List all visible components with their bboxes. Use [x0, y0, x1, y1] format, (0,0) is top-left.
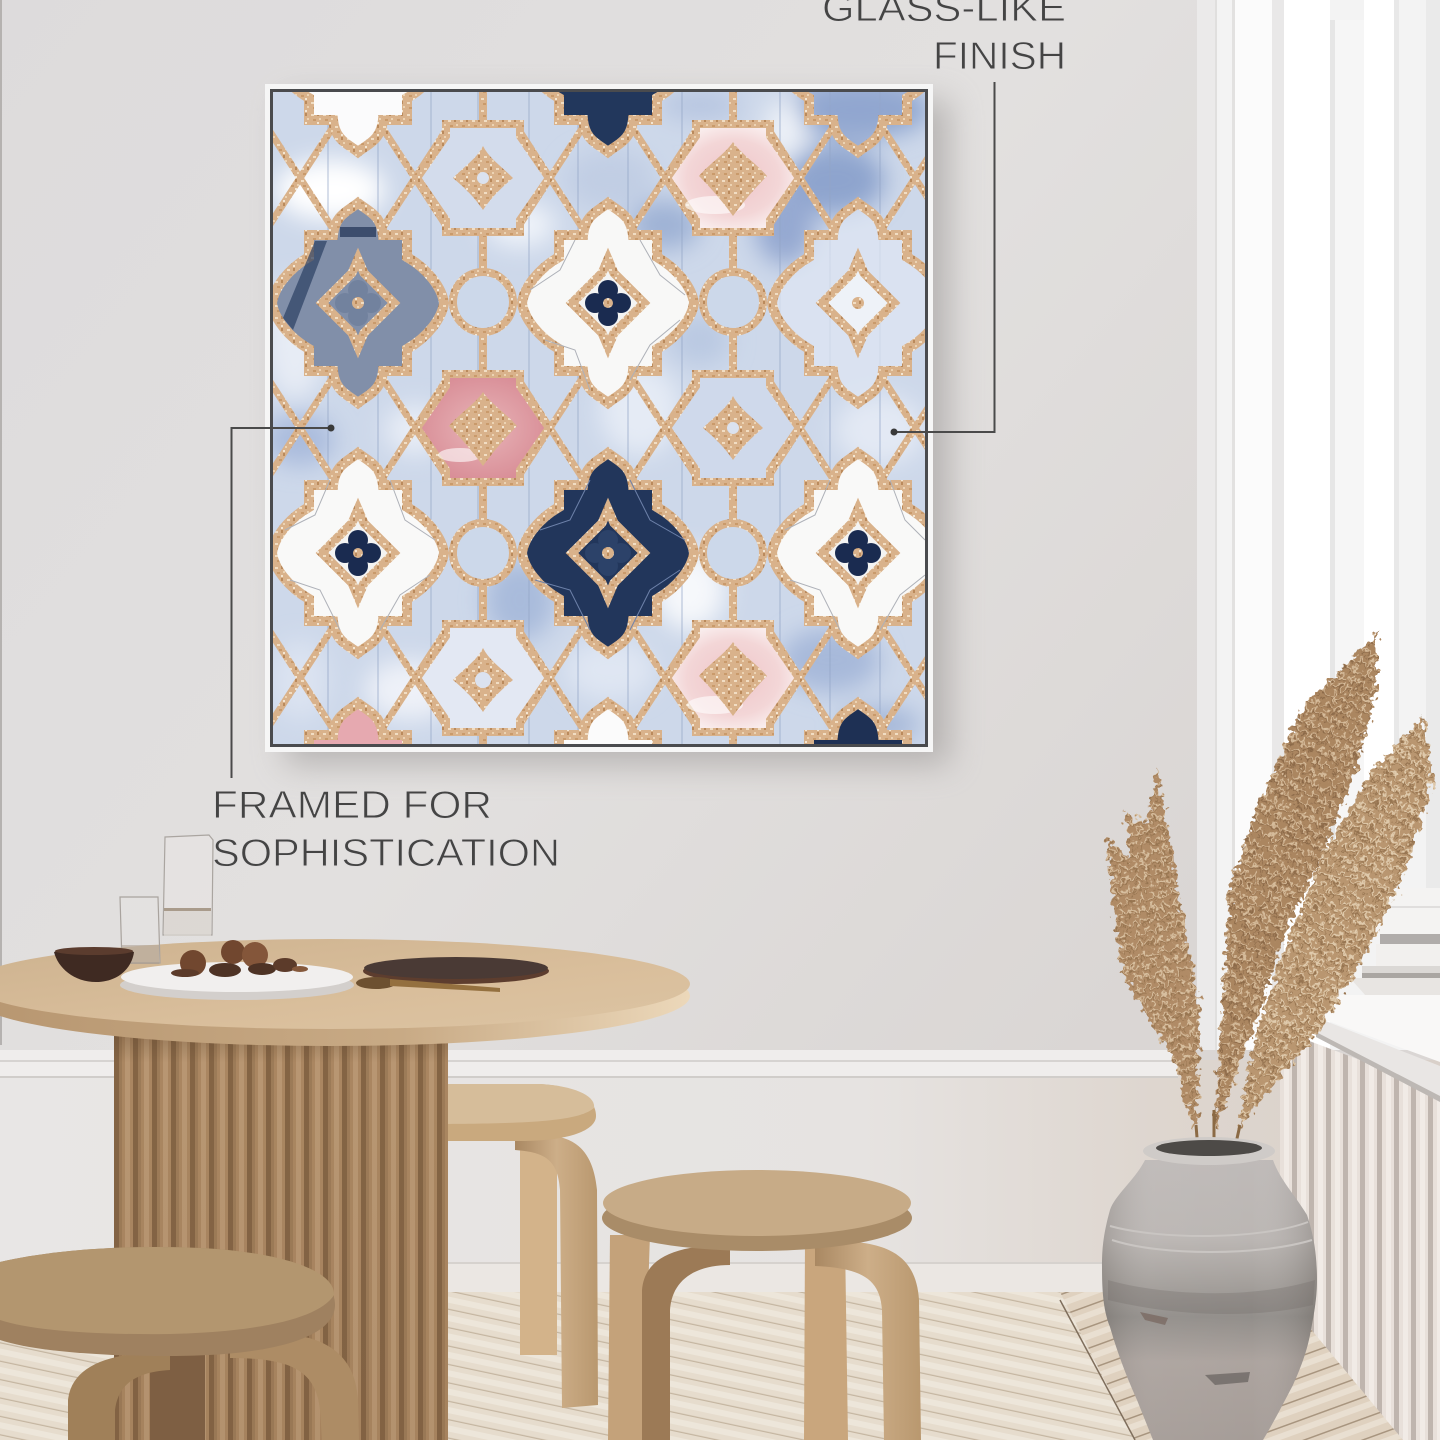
vertical connectors — [479, 92, 737, 746]
ring medallions — [453, 272, 763, 583]
wainscot rail and baseboard — [0, 1050, 1280, 1292]
table top — [0, 939, 690, 1046]
gold centre ornaments — [449, 142, 767, 716]
pampas: left plume — [1107, 767, 1200, 1130]
hexagon medallions — [417, 124, 799, 732]
radiator — [1280, 1030, 1440, 1440]
centre stool — [602, 1170, 921, 1440]
marble plate — [120, 962, 354, 1000]
table pedestal — [114, 1030, 448, 1440]
wooden floor — [0, 1292, 1403, 1440]
window frame and trim — [1197, 0, 1440, 1050]
leader line: glass-like finish — [890, 82, 994, 436]
pampas: middle plume — [1213, 633, 1377, 1130]
pampas: stems — [1196, 1110, 1240, 1152]
window sill — [1316, 995, 1440, 1102]
label: framed for sophistication — [212, 784, 560, 875]
pampas: right plume — [1238, 717, 1433, 1130]
front left stool — [0, 1247, 359, 1440]
quatrefoils — [273, 92, 925, 744]
label: framed for sophistication: SOPHISTICATION — [212, 832, 560, 875]
highlights on gray quatrefoil — [283, 241, 327, 330]
shadow of framed art — [285, 100, 950, 765]
glass carafe — [163, 835, 213, 936]
rose petals — [438, 196, 745, 714]
dark wooden bowl — [54, 947, 134, 982]
inner diamonds — [322, 259, 894, 597]
label: glass-like finish: FINISH — [933, 35, 1066, 78]
ceramic vase — [1102, 1137, 1317, 1440]
label: glass-like finish — [822, 0, 1066, 78]
lattice crossings — [265, 124, 950, 732]
dark wooden plate — [363, 957, 549, 984]
leader line: framed for sophistication — [232, 424, 334, 778]
crackle lines — [285, 240, 925, 630]
inner flowers — [335, 280, 381, 326]
white frame — [265, 84, 933, 752]
label: framed for sophistication: FRAMED FOR — [212, 784, 492, 827]
back stool — [430, 1084, 598, 1408]
books on window sill — [1350, 934, 1440, 996]
watercolour background — [265, 82, 930, 743]
pampas grass — [1107, 633, 1433, 1152]
nuts on plate — [171, 940, 308, 977]
framed art — [265, 84, 933, 752]
art pattern — [273, 92, 925, 744]
glass tumbler — [120, 897, 160, 964]
spoons — [356, 977, 500, 992]
wooden plank lines — [328, 92, 880, 744]
